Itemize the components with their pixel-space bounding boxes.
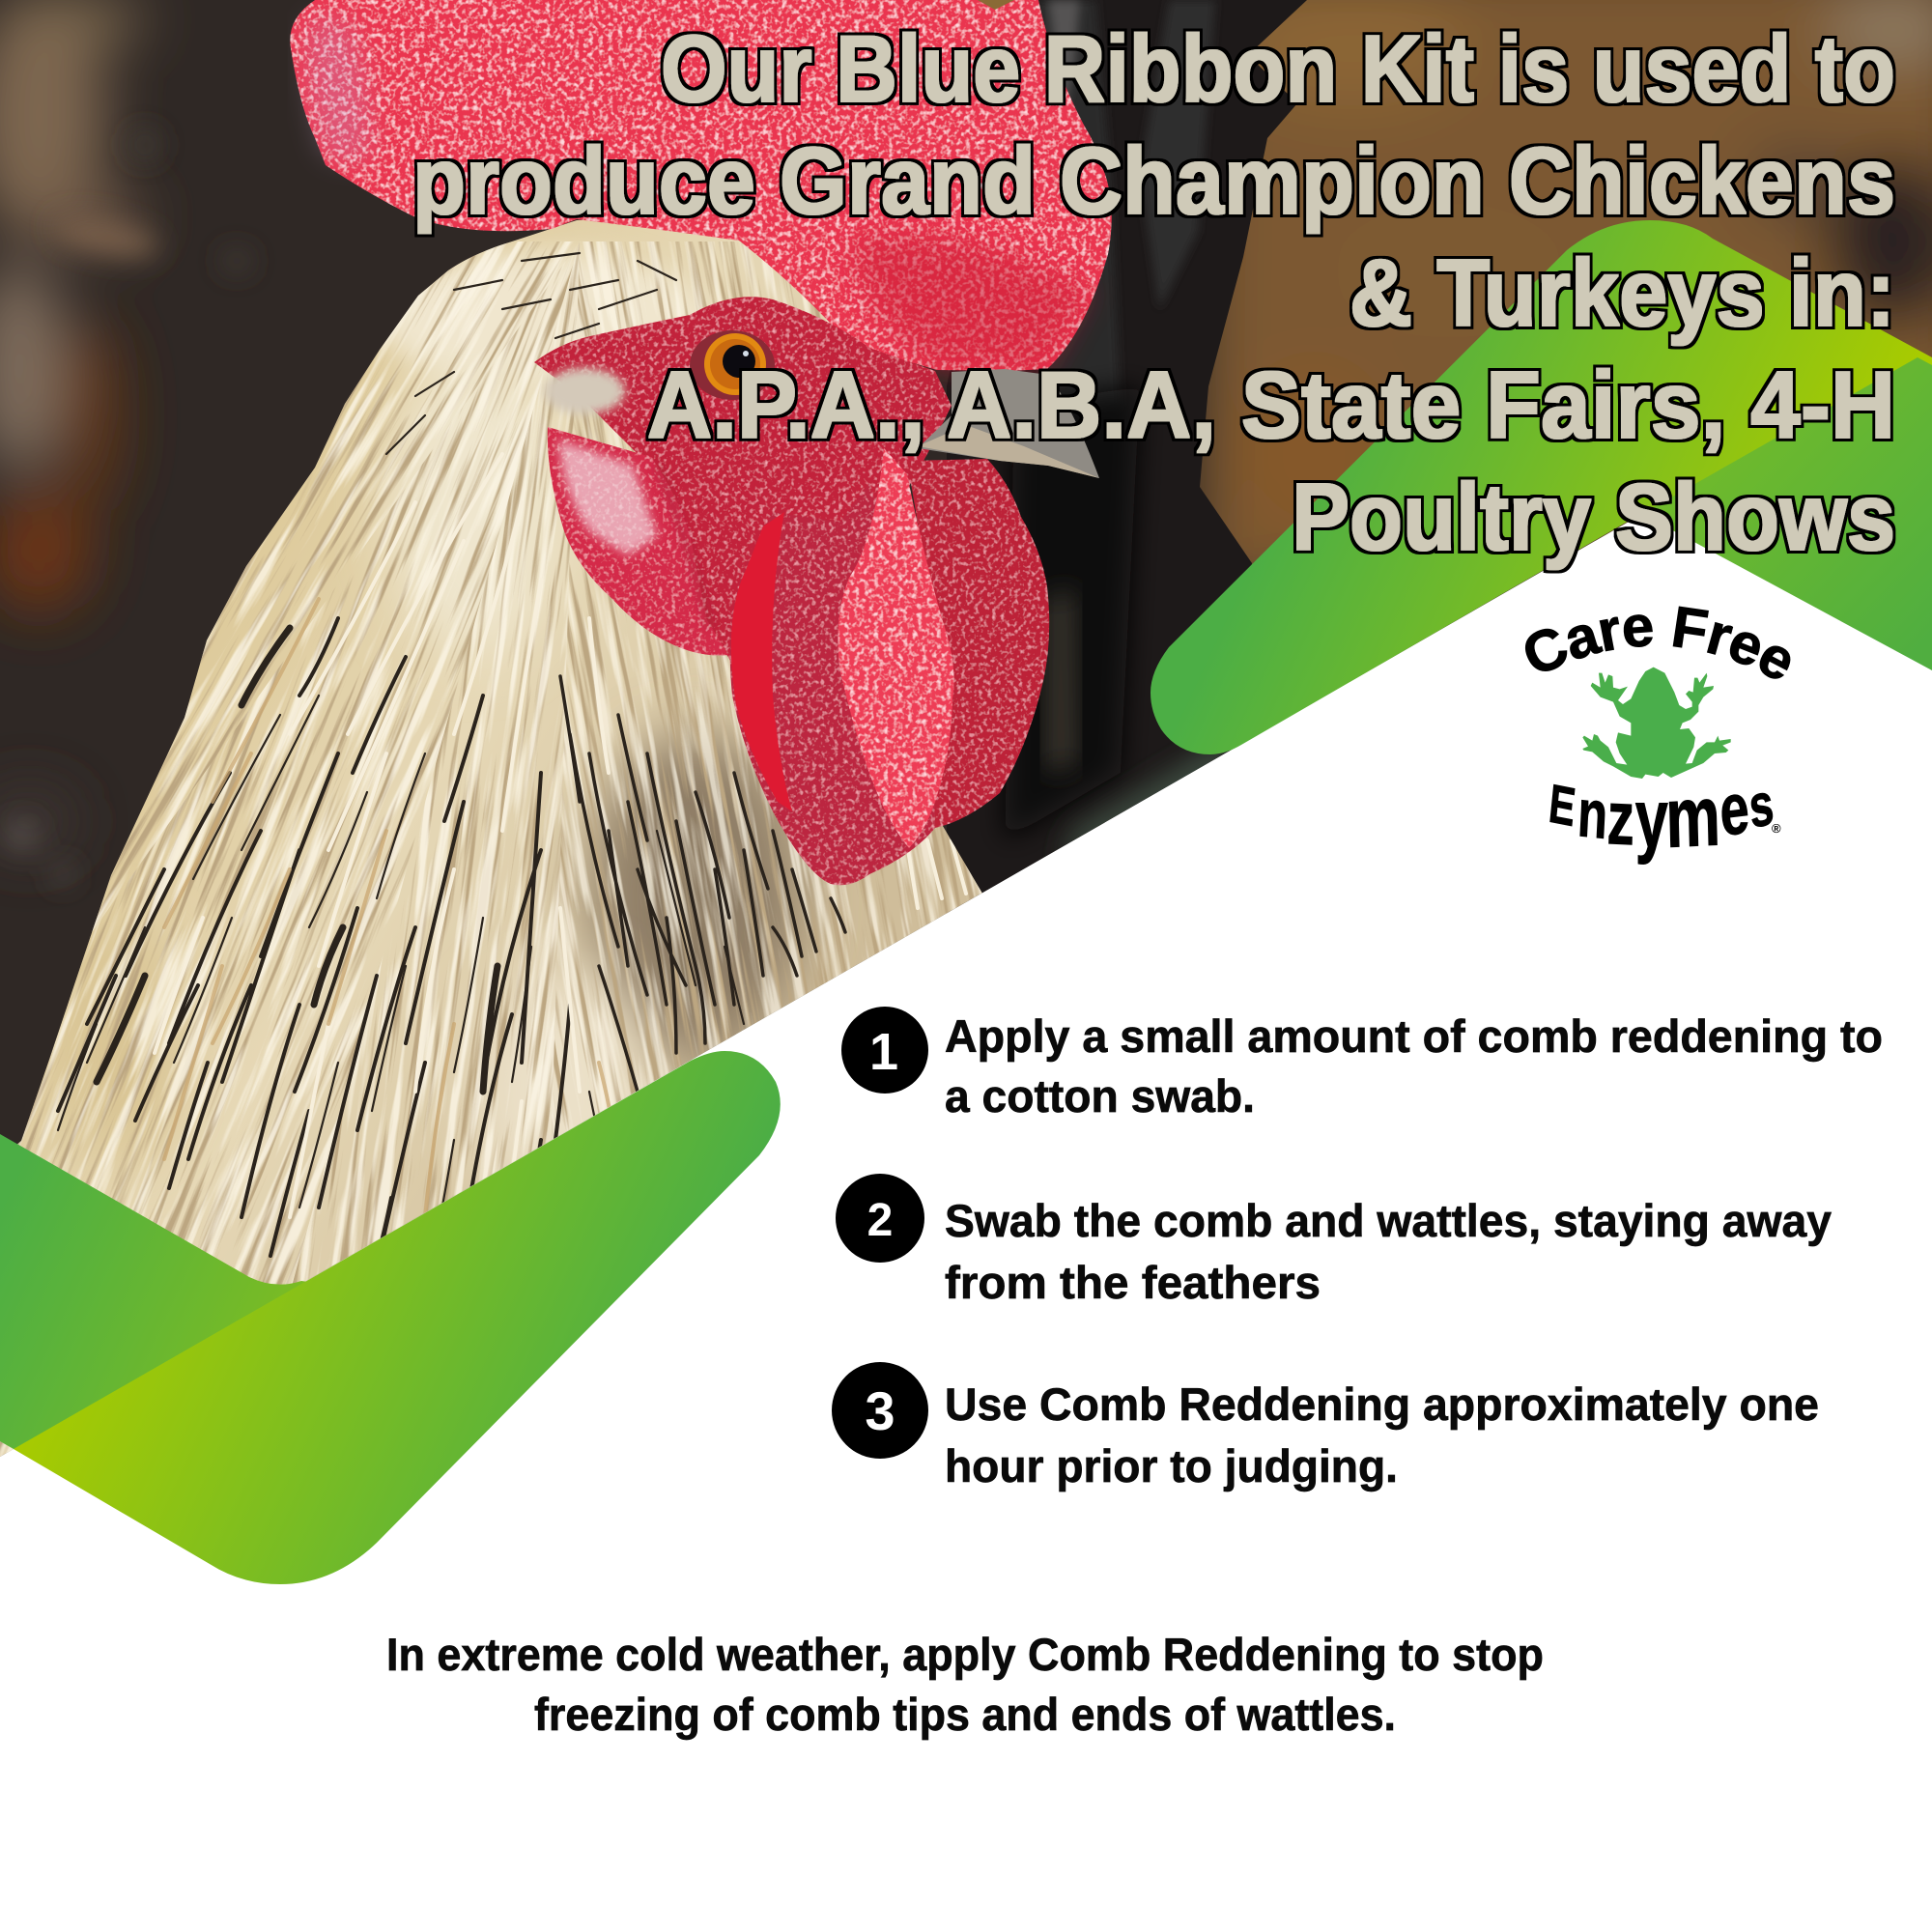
cold weather note	[386, 1629, 1544, 1740]
step 2 text: Swab the comb and wattles, staying away	[945, 1195, 1832, 1246]
green chevron: upper right shape	[1642, 357, 1932, 670]
green chevron: upper arm	[1151, 220, 1932, 754]
step 2 text: from the feathers	[945, 1257, 1321, 1308]
logo wordmark bottom: m	[1664, 769, 1721, 866]
beak	[918, 369, 1099, 478]
dark tail feathers	[947, 0, 1307, 927]
logo wordmark bottom: n	[1576, 775, 1609, 853]
number badge 2: 2	[867, 1195, 893, 1246]
step 1 text: Apply a small amount of comb reddening to	[945, 1010, 1883, 1062]
step 1 text	[945, 1010, 1883, 1122]
title	[412, 15, 1895, 570]
cold weather note: freezing of comb tips and ends of wattles.	[534, 1689, 1396, 1740]
step 2	[836, 1174, 1832, 1308]
logo wordmark bottom: e	[1718, 767, 1751, 851]
logo wordmark bottom: E	[1547, 774, 1578, 838]
title: A.P.A., A.B.A, State Fairs, 4-H	[647, 352, 1895, 458]
title: Poultry Shows	[1292, 464, 1895, 570]
step 1 text: a cotton swab.	[945, 1070, 1255, 1122]
step 3 text: hour prior to judging.	[945, 1440, 1398, 1492]
neck feathers	[0, 220, 982, 1457]
logo wordmark bottom: y	[1635, 773, 1668, 865]
step 1	[841, 1007, 1883, 1122]
title: & Turkeys in:	[1350, 240, 1895, 346]
brown hen behind, top right	[1198, 0, 1932, 599]
registered mark: ®	[1772, 821, 1781, 836]
step 3 text: Use Comb Reddening approximately one	[945, 1378, 1819, 1430]
ear lobe	[548, 427, 728, 655]
comb	[290, 0, 1112, 371]
eye	[690, 330, 775, 400]
number badge 2	[836, 1174, 924, 1263]
logo wordmark top: Care Free	[1524, 607, 1791, 679]
rooster photo	[0, 0, 1932, 1457]
step 3	[832, 1362, 1819, 1492]
green chevron: lower left arm	[0, 1134, 328, 1449]
centre wattle fold	[838, 448, 954, 848]
cold weather note: In extreme cold weather, apply Comb Reddening to stop	[386, 1629, 1544, 1680]
right wattle	[907, 459, 1049, 828]
number badge 3: 3	[865, 1380, 895, 1441]
number badge 1: 1	[869, 1023, 898, 1081]
face skin	[534, 297, 952, 667]
blurred barn background	[0, 0, 1932, 1468]
logo wordmark bottom: z	[1606, 776, 1635, 862]
step 3 text	[945, 1378, 1819, 1492]
number badge 1	[841, 1007, 928, 1094]
icon: frog	[1582, 668, 1731, 779]
logo wordmark bottom: s	[1746, 771, 1776, 841]
number badge 3	[832, 1362, 928, 1459]
step 2 text	[945, 1195, 1832, 1308]
green chevron: lower main shape	[14, 1051, 781, 1584]
white notch under upper arm	[1352, 514, 1932, 773]
left wattle	[730, 483, 935, 885]
logo: Care Free Enzymes	[1524, 607, 1791, 866]
